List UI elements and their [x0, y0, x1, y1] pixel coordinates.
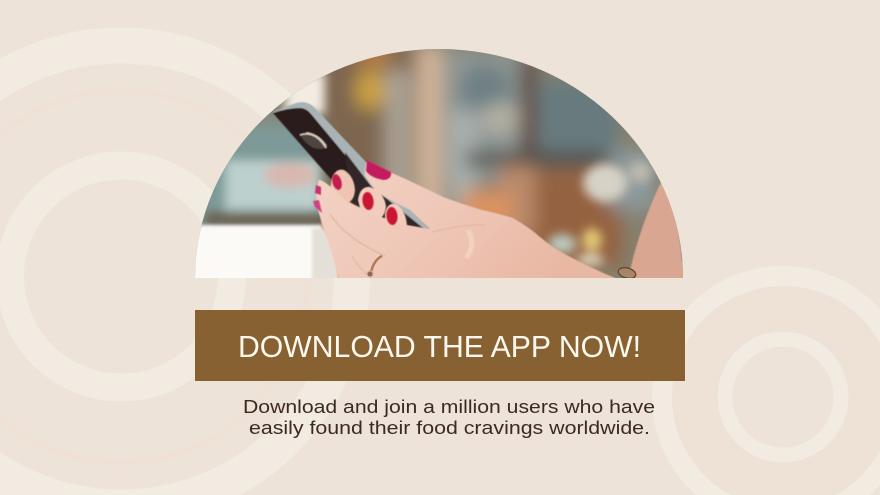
background rings: right	[662, 276, 880, 495]
person in background at right	[630, 182, 683, 278]
heading: DOWNLOAD THE APP NOW!	[238, 329, 641, 364]
background rings: left	[0, 46, 352, 495]
creases	[330, 214, 385, 256]
banner	[195, 310, 685, 381]
icon: smartphone	[273, 102, 432, 232]
blurred cafe background	[190, 45, 655, 265]
rings on fingers	[367, 256, 637, 280]
hand	[316, 161, 620, 280]
white table edge	[190, 225, 342, 283]
back fingers	[330, 170, 355, 203]
nails	[313, 160, 398, 225]
body text: easily found their food cravings worldwide.	[249, 418, 650, 438]
palm, index finger and thumb	[316, 161, 620, 280]
body text: Download and join a million users who have	[243, 397, 655, 417]
body text	[243, 397, 655, 438]
photo: hand holding a phone in a half-dome	[190, 45, 690, 283]
